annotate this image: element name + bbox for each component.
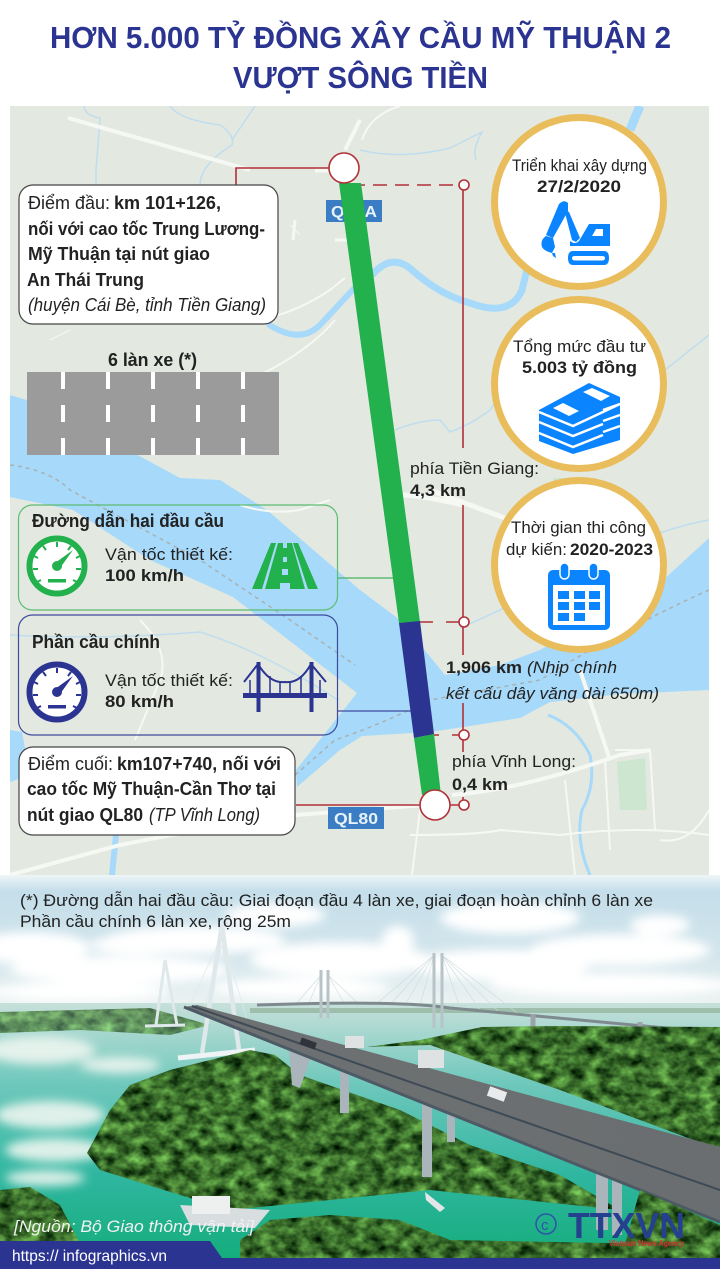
logo: TTXVN: Vietnam News Agency — [609, 1239, 684, 1248]
label: main span distance: (Nhịp chính — [527, 658, 617, 677]
border dashed line — [10, 465, 709, 775]
footnote: (*) Đường dẫn hai đầu cầu: Giai đoạn đầu 4 làn xe, giai đoạn hoàn chỉnh 6 làn xe — [20, 891, 653, 910]
panel: construction period: 2020-2023 — [570, 540, 653, 559]
label: Vinh Long side distance: phía Vĩnh Long: — [452, 752, 576, 771]
callout: start point: km 101+126, — [114, 193, 221, 213]
river — [10, 395, 709, 787]
heading: main bridge: Phần cầu chính — [32, 632, 160, 652]
icon: navy speedometer — [30, 664, 84, 720]
label: main span distance — [446, 658, 659, 703]
panel: approach road: Vận tốc thiết kế: — [105, 545, 233, 564]
route: bridge alignment — [339, 183, 441, 795]
panel: main bridge — [18, 615, 338, 735]
title: VƯỢT SÔNG TIỀN — [233, 59, 488, 95]
label: Tien Giang side distance: 4,3 km — [410, 481, 466, 500]
near towers — [145, 925, 255, 1058]
icon: suspension bridge — [243, 662, 327, 712]
label: Vinh Long side distance: 0,4 km — [452, 775, 508, 794]
panel: approach road: 100 km/h — [105, 566, 184, 585]
panel: construction period: dự kiến: — [506, 540, 567, 559]
river water — [0, 1003, 720, 1269]
lane diagram: 6 lanes: 6 làn xe (*) — [108, 350, 197, 370]
callout: start point: (huyện Cái Bè, tỉnh Tiền Giang) — [28, 295, 266, 315]
title — [50, 19, 671, 95]
footnote — [20, 891, 653, 931]
icon: road — [252, 543, 318, 589]
callout: end point: (TP Vĩnh Long) — [149, 805, 260, 825]
icon: green speedometer — [30, 538, 84, 594]
label: Vinh Long side distance — [452, 752, 576, 794]
bridge piers — [289, 1048, 622, 1235]
panel: construction start: 27/2/2020 — [537, 177, 621, 196]
clouds — [0, 902, 720, 1002]
panel: construction start: Triển khai xây dựng — [512, 156, 647, 175]
route shield: QL1A — [326, 200, 382, 222]
icon: calendar — [548, 563, 610, 630]
bottom foreground — [0, 1187, 80, 1243]
start point marker — [329, 153, 359, 183]
panel: construction period: Thời gian thi công — [511, 518, 646, 537]
lane diagram: 6 lanes — [27, 350, 279, 455]
panel: total investment: Tổng mức đầu tư — [513, 337, 646, 356]
photo: rendering of the bridge — [0, 875, 720, 1269]
callout: end point — [19, 747, 295, 835]
footnote: Phần cầu chính 6 làn xe, rộng 25m — [20, 912, 291, 931]
route shield: QL1A: QL1A — [331, 204, 377, 221]
far shore trees — [0, 1008, 210, 1035]
panel: main bridge: 80 km/h — [105, 692, 174, 711]
right forest — [367, 1026, 720, 1150]
boat — [180, 1192, 445, 1228]
icon: excavator — [542, 201, 610, 265]
label: Tien Giang side distance: phía Tiền Giang: — [410, 459, 539, 478]
icon: money stack — [539, 383, 620, 454]
callout: end point: Điểm cuối: — [28, 754, 113, 774]
streams — [10, 106, 709, 700]
label: main span distance: kết cấu dây văng dài 650m) — [446, 684, 659, 703]
connector: main bridge — [338, 710, 412, 712]
far bridge — [257, 953, 670, 1028]
panel: total investment: 5.003 tỷ đồng — [522, 358, 637, 377]
bridge deck — [184, 1005, 720, 1222]
label: main span distance: 1,906 km — [446, 658, 522, 677]
footer bar with url — [0, 1241, 720, 1269]
panel: main bridge: Vận tốc thiết kế: — [105, 671, 233, 690]
logo: TTXVN: TTXVN — [568, 1205, 685, 1246]
callout: start point: An Thái Trung — [27, 270, 144, 290]
callout: start point: Mỹ Thuận tại nút giao — [28, 244, 210, 264]
panel: construction start — [494, 118, 664, 286]
front island trees — [87, 1050, 620, 1210]
route shield: QL80 — [328, 807, 384, 829]
callout: start point: nối với cao tốc Trung Lương- — [28, 219, 265, 239]
panel: approach road — [18, 505, 338, 610]
callout: end point: cao tốc Mỹ Thuận-Cần Thơ tại — [27, 779, 276, 799]
source note: [Nguồn: Bộ Giao thông vận tải] — [13, 1217, 255, 1236]
roads — [10, 106, 709, 875]
callout: end point: km107+740, nối với — [117, 754, 281, 774]
distance markers and connector lines — [236, 168, 469, 810]
heading: approach road: Đường dẫn hai đầu cầu — [32, 510, 224, 531]
callout: start point: Điểm đầu: — [28, 193, 110, 213]
end point marker — [420, 790, 450, 820]
logo: TTXVN: c — [541, 1217, 549, 1234]
title: HƠN 5.000 TỶ ĐỒNG XÂY CẦU MỸ THUẬN 2 — [50, 19, 671, 55]
map background — [10, 106, 709, 875]
connector: approach road — [338, 577, 394, 579]
callout: start point — [19, 185, 278, 324]
label: Tien Giang side distance — [410, 459, 539, 500]
panel: construction period — [494, 480, 664, 650]
callout: end point: nút giao QL80 — [27, 805, 143, 825]
footer bar with url: https:// infographics.vn — [12, 1248, 167, 1265]
panel: total investment — [494, 300, 664, 468]
route shield: QL80: QL80 — [334, 811, 378, 828]
